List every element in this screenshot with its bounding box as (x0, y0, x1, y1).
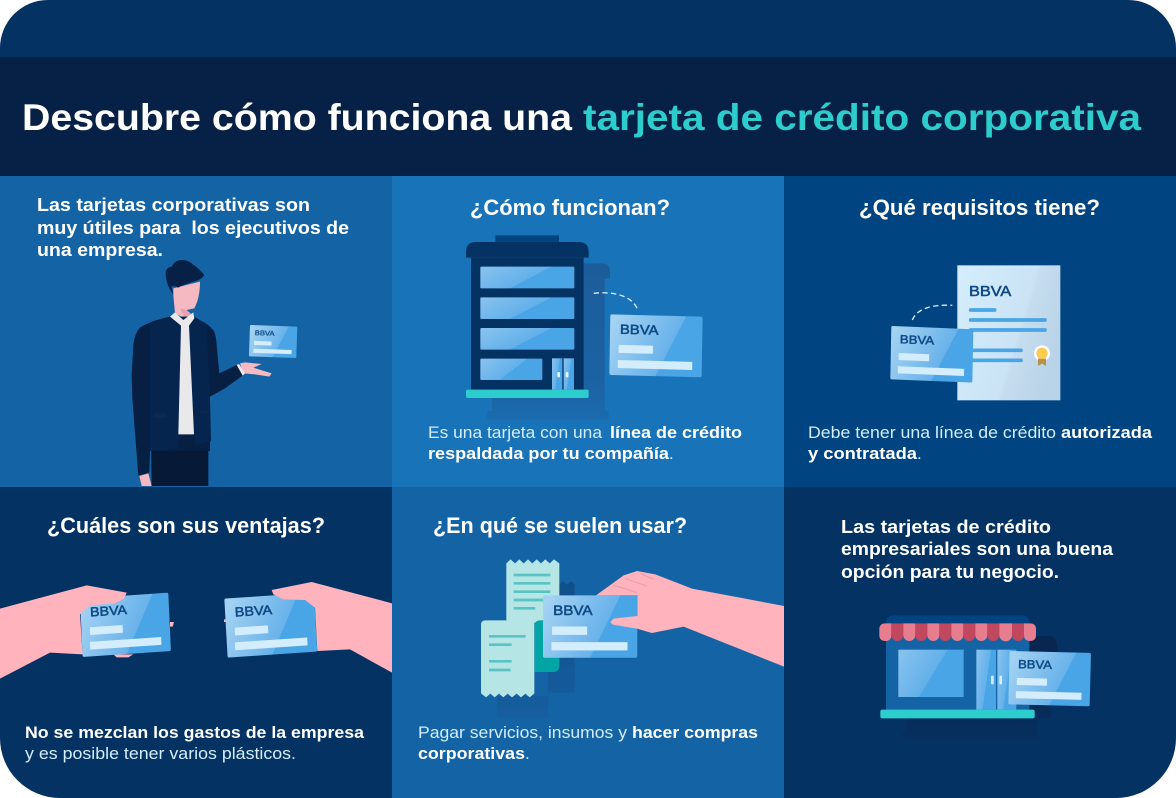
conclusion text: Las tarjetas de crédito (841, 517, 1051, 537)
body text: No se mezclan los gastos de la empresa (25, 723, 365, 742)
heading: ¿Cómo funcionan? (470, 195, 670, 220)
illustration: receipts, card and hand (481, 559, 784, 718)
body text: autorizada (1061, 423, 1153, 442)
heading: ¿En qué se suelen usar? (433, 513, 687, 538)
body text: . (525, 744, 530, 763)
body text (418, 723, 758, 763)
awning (879, 623, 1036, 641)
body text (25, 723, 365, 763)
panel: executives (0, 176, 392, 487)
left hand (0, 585, 127, 679)
body text: respaldada por tu compañía (428, 444, 670, 463)
title: tarjeta de crédito corporativa (583, 97, 1141, 138)
body text (428, 423, 742, 463)
panel: usos (392, 487, 784, 798)
intro text: Las tarjetas corporativas son (37, 195, 310, 215)
body text: corporativas (418, 744, 525, 763)
right card (224, 593, 317, 658)
illustration: building and card (466, 235, 703, 419)
body text: y contratada (808, 444, 918, 463)
card: BBVA (553, 603, 593, 618)
body text: . (669, 444, 674, 463)
card (890, 326, 973, 383)
top band (0, 0, 1176, 57)
title (24, 102, 1142, 138)
intro text: una empresa. (37, 240, 163, 260)
illustration: hands exchanging cards (0, 582, 392, 679)
body text: línea de crédito (610, 423, 742, 442)
heading: ¿Qué requisitos tiene? (859, 195, 1100, 220)
card: BBVA (255, 330, 275, 338)
left card (80, 593, 171, 657)
body text (808, 423, 1153, 463)
body text: . (917, 444, 922, 463)
illustration: document and card (890, 265, 1060, 400)
illustration: document and card: BBVA (969, 284, 1012, 300)
conclusion text: empresariales son una buena (841, 539, 1114, 559)
intro text: muy útiles para los ejecutivos de (37, 218, 349, 238)
header band (0, 57, 1176, 176)
intro text (37, 195, 349, 260)
card (543, 595, 637, 658)
card (609, 314, 703, 377)
card (1008, 651, 1091, 706)
panel: conclusion (784, 487, 1176, 798)
card (249, 325, 297, 358)
body text: Debe tener una línea de crédito (808, 423, 1056, 442)
panel: cómo funcionan (392, 176, 784, 487)
card: BBVA (620, 322, 659, 338)
heading: ¿Cuáles son sus ventajas? (47, 513, 325, 538)
conclusion text (841, 517, 1114, 582)
body text: Pagar servicios, insumos y (418, 723, 628, 742)
card: BBVA (1018, 658, 1052, 672)
body text: Es una tarjeta con una (428, 423, 603, 442)
right hand (272, 582, 392, 673)
card: BBVA (900, 333, 934, 348)
right card: BBVA (234, 602, 273, 620)
left card: BBVA (90, 602, 128, 620)
panel: requisitos (784, 176, 1176, 487)
title: Descubre cómo funciona una (22, 97, 572, 138)
panel: ventajas (0, 487, 392, 798)
illustration: storefront and card (879, 616, 1091, 722)
illustration: man holding card (132, 260, 297, 486)
conclusion text: opción para tu negocio. (841, 562, 1059, 582)
body text: hacer compras (632, 723, 758, 742)
body text: y es posible tener varios plásticos. (25, 744, 296, 763)
